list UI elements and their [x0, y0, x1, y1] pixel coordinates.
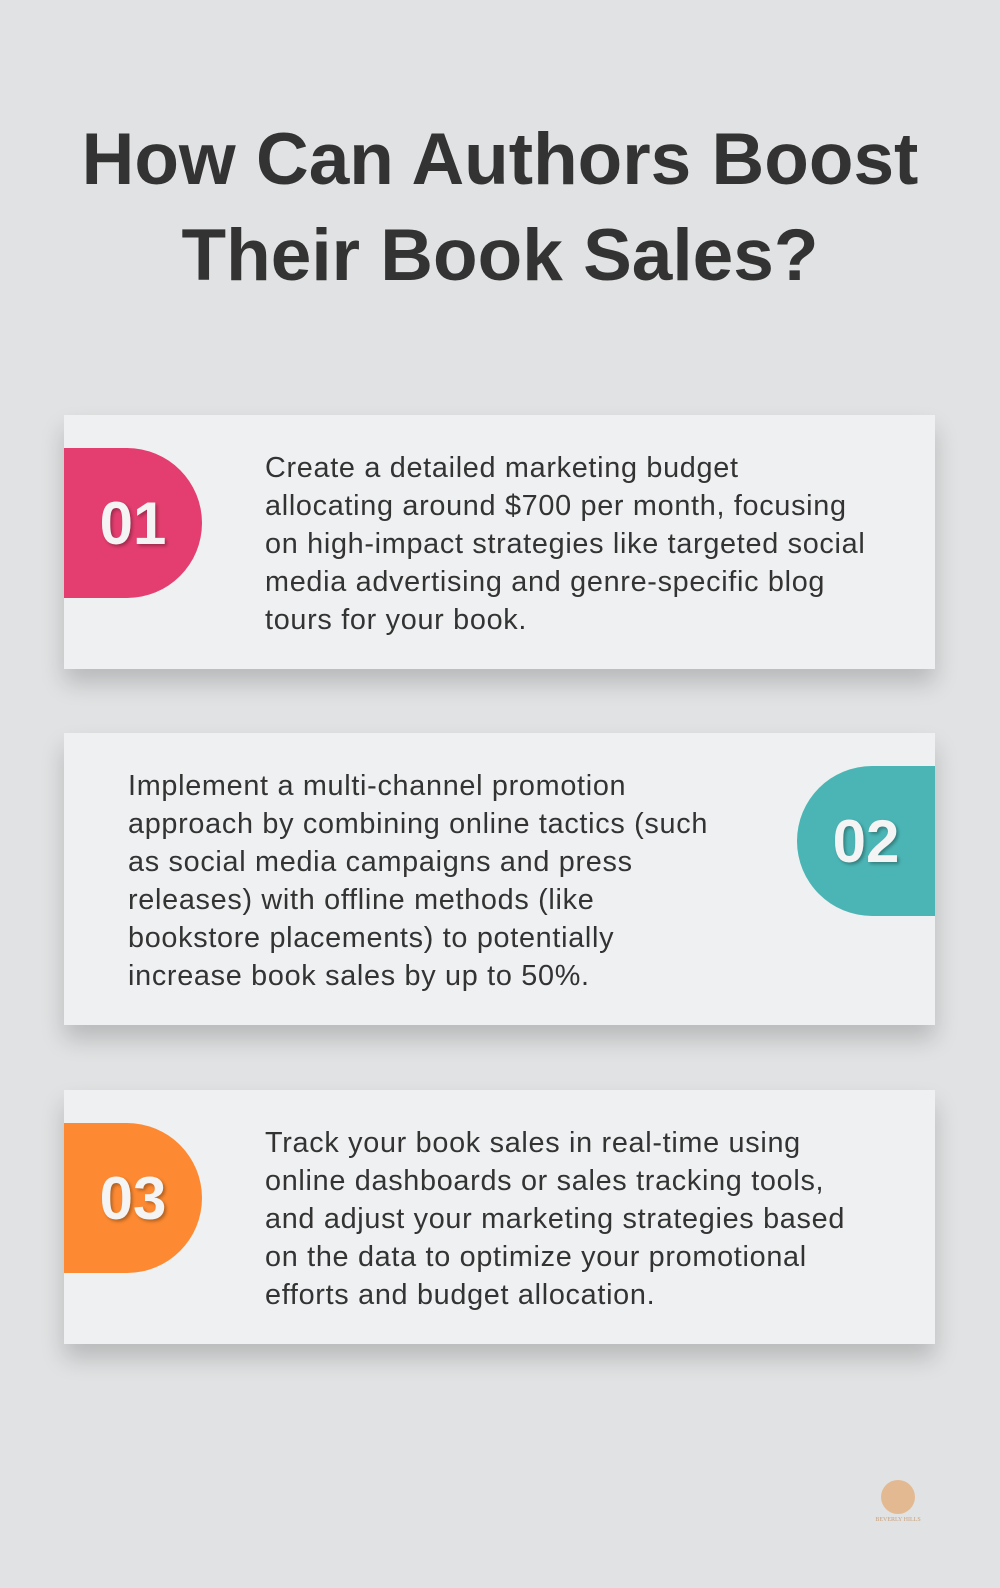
text 03: efforts and budget allocation.: [265, 1279, 655, 1311]
text 01: media advertising and genre-specific blog: [265, 566, 825, 598]
text 02: bookstore placements) to potentially: [128, 922, 614, 954]
title: How Can Authors Boost: [82, 119, 918, 200]
text 01: [265, 452, 865, 636]
badge 03: 03: [100, 1164, 166, 1232]
badge 02: 02: [833, 808, 899, 874]
text 03: [265, 1127, 845, 1311]
text 01: tours for your book.: [265, 604, 527, 636]
title: Their Book Sales?: [182, 215, 818, 296]
text 02: approach by combining online tactics (such: [128, 808, 708, 840]
badge 01: 01: [100, 490, 166, 556]
panel: step 02: [64, 733, 935, 1025]
text 02: [128, 770, 708, 992]
text 03: and adjust your marketing strategies based: [265, 1203, 845, 1235]
panel: step 01: [64, 415, 935, 669]
text 01: on high-impact strategies like targeted social: [265, 528, 865, 560]
text 01: Create a detailed marketing budget: [265, 452, 739, 484]
title: [82, 119, 918, 296]
text 01: allocating around $700 per month, focusing: [265, 490, 847, 522]
badge 01: [64, 448, 202, 598]
badge 03: [64, 1123, 202, 1273]
text 02: increase book sales by up to 50%.: [128, 960, 590, 992]
logo: [875, 1480, 921, 1523]
text 02: Implement a multi-channel promotion: [128, 770, 626, 802]
badge 02: [797, 766, 935, 916]
panel: step 03: [64, 1090, 935, 1344]
text 02: releases) with offline methods (like: [128, 884, 594, 916]
logo: BEVERLY HILLS: [875, 1517, 921, 1523]
text 03: online dashboards or sales tracking tools,: [265, 1165, 824, 1197]
text 02: as social media campaigns and press: [128, 846, 633, 878]
text 03: Track your book sales in real-time using: [265, 1127, 801, 1159]
text 03: on the data to optimize your promotional: [265, 1241, 807, 1273]
